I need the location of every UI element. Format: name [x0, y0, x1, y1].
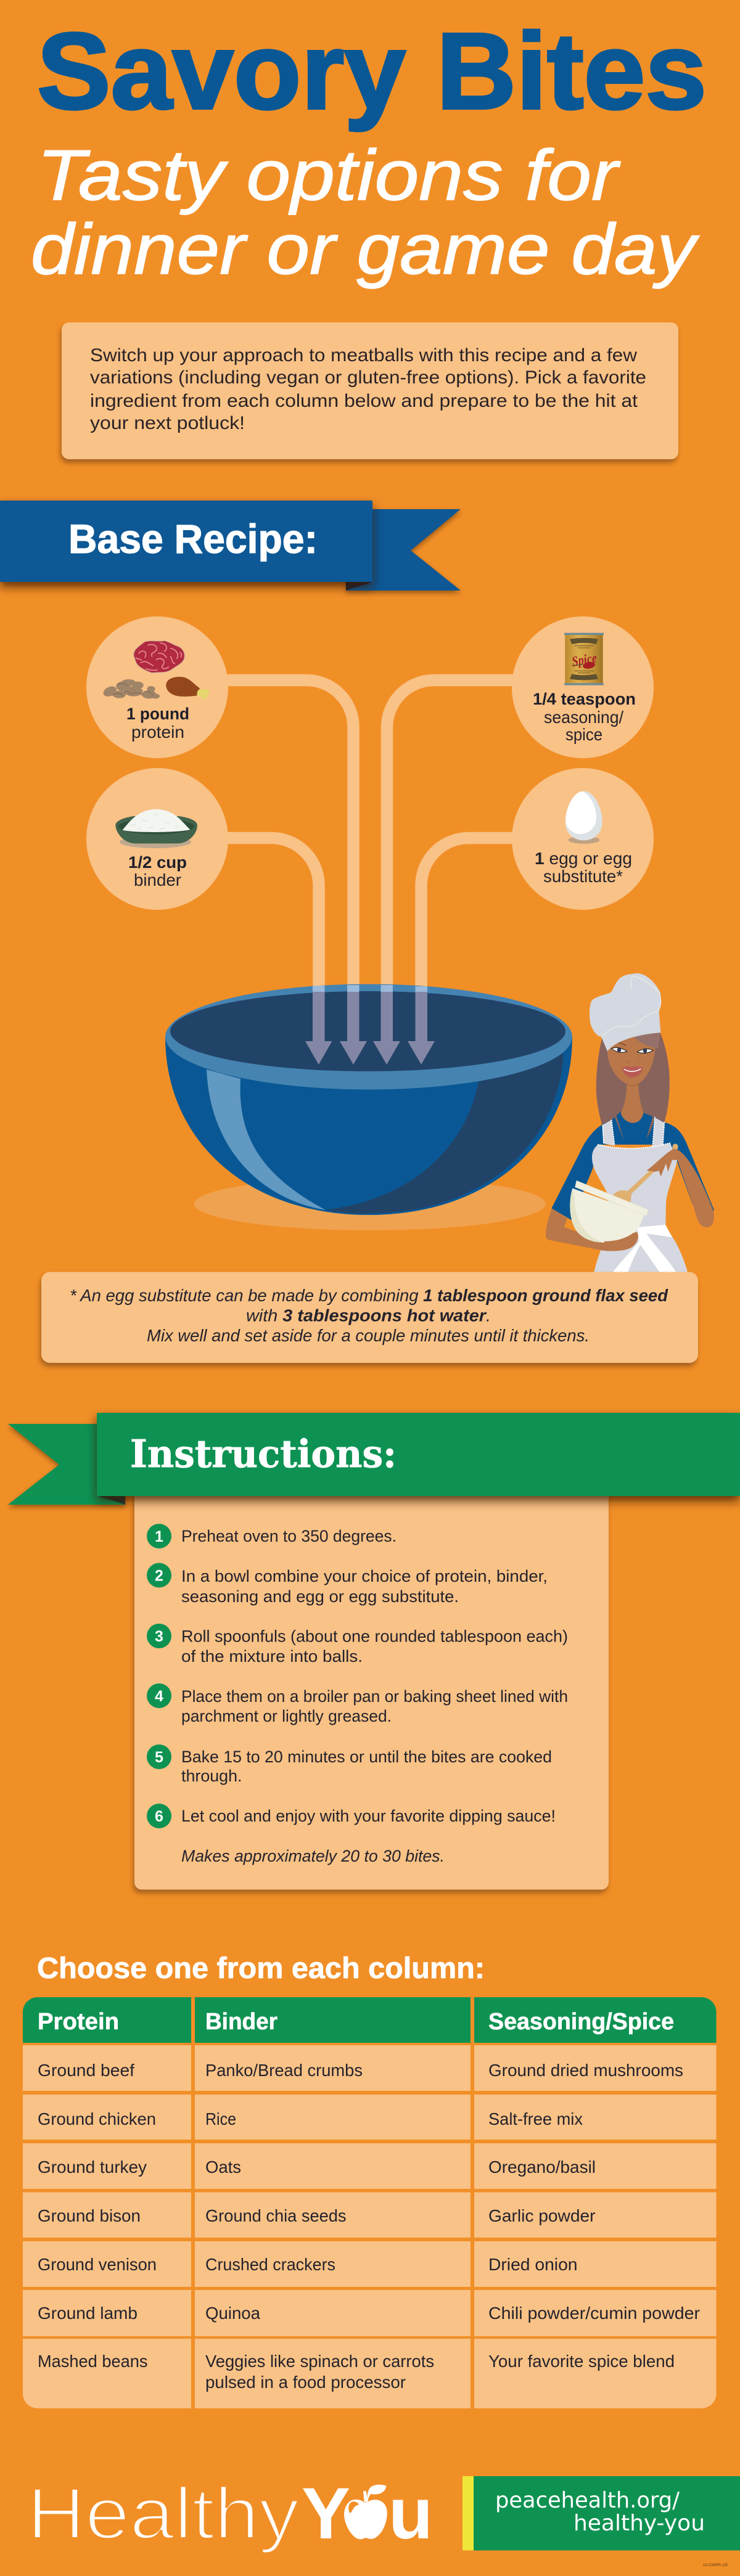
table header: Binder: [205, 2009, 278, 2035]
step 4: Place them on a broiler pan or baking sheet lined with: [181, 1687, 568, 1706]
step 5: 5: [155, 1749, 163, 1766]
step 2: 2: [155, 1567, 163, 1584]
label: 1/2 cup binder: [128, 853, 187, 889]
label: 1 pound protein: [126, 705, 189, 742]
column: binder: Oats: [205, 2157, 241, 2177]
apron: [592, 1118, 688, 1272]
fingers on bowl: [604, 1233, 638, 1251]
column: binder: Panko/Bread crumbs: [205, 2061, 363, 2080]
column: binder: Veggies like spinach or carrots: [205, 2352, 434, 2371]
step 1: 1: [155, 1528, 163, 1545]
step 2: [147, 1563, 548, 1606]
note text: * An egg substitute can be made by combining 1 tablespoon ground flax seed: [70, 1286, 668, 1305]
hair: [596, 1032, 670, 1126]
ingredient: egg: [512, 768, 654, 910]
icon: apple: [344, 2485, 387, 2539]
column: binder: Quinoa: [205, 2304, 260, 2323]
heading: instructions: Instructions:: [130, 1431, 397, 1476]
column: protein: Ground beef: [38, 2061, 134, 2080]
bowl rim: [165, 984, 572, 1090]
note text: with 3 tablespoons hot water .: [246, 1306, 491, 1325]
step 1: Preheat oven to 350 degrees.: [181, 1527, 397, 1545]
table cells: [23, 2045, 717, 2408]
website text: peacehealth.org/: [495, 2488, 680, 2513]
mixing bowl: [570, 1180, 649, 1243]
column: binder: Crushed crackers: [205, 2255, 335, 2274]
column: binder: Rice: [205, 2109, 236, 2128]
note text: [70, 1286, 668, 1345]
ingredient: protein: [86, 616, 228, 758]
step 2: seasoning and egg or egg substitute.: [181, 1587, 459, 1606]
panel: instructions: [134, 1479, 609, 1890]
icon: ground beef, beans and drumstick: [102, 640, 209, 699]
label: 1/4 teaspoon seasoning: seasoning/: [544, 708, 623, 727]
spoon: [628, 1143, 678, 1194]
step 3: of the mixture into balls.: [181, 1647, 363, 1666]
label: 1 pound protein: 1 pound: [126, 705, 189, 723]
column: seasoning: Oregano/basil: [488, 2157, 596, 2177]
column: protein: Ground venison: [38, 2255, 157, 2274]
ingredient: seasoning: [512, 616, 654, 758]
icon: spice can: [564, 633, 604, 685]
note text: Mix well and set aside for a couple minutes until it thickens.: [147, 1326, 590, 1345]
illustration: mixing bowl with arrows: [165, 984, 572, 1230]
hair strands: [615, 1115, 655, 1140]
icon: spice can: Spice: [570, 650, 598, 669]
job code: 18-COMPR-135: [703, 2563, 728, 2567]
left arm: [546, 1208, 638, 1251]
icon: egg: [565, 791, 602, 844]
shirt: [551, 1111, 714, 1220]
logo: Healthy You: u: [388, 2473, 433, 2554]
yield note: Makes approximately 20 to 30 bites.: [181, 1847, 445, 1865]
step 2: In a bowl combine your choice of protein, binder,: [181, 1567, 548, 1585]
footer: website block: [462, 2476, 740, 2551]
arrows into bowl: [305, 985, 435, 1065]
intro text: your next potluck!: [90, 413, 245, 433]
title: Savory Bites: [37, 11, 707, 132]
label: 1 egg or egg substitute: 1 egg or egg: [535, 849, 632, 868]
ribbon: base recipe: [0, 501, 461, 591]
label: 1/4 teaspoon seasoning: [533, 690, 636, 744]
lips: [622, 1060, 643, 1077]
face: [607, 1036, 655, 1086]
column: seasoning: [488, 2061, 700, 2371]
heading: base recipe: Base Recipe:: [68, 516, 318, 562]
subtitle: dinner or game day: [31, 209, 699, 289]
label: 1/2 cup binder: 1/2 cup: [128, 853, 187, 872]
label: 1/4 teaspoon seasoning: 1/4 teaspoon: [533, 690, 636, 708]
column: protein: Ground bison: [38, 2206, 141, 2225]
step 3: [147, 1624, 568, 1666]
website text: healthy-you: [574, 2511, 705, 2536]
ingredient: binder: [86, 768, 228, 910]
subtitle: [31, 135, 699, 289]
step 4: 4: [155, 1688, 163, 1705]
table header: Protein: [38, 2009, 119, 2035]
step 3: 3: [155, 1628, 163, 1645]
column: seasoning: Ground dried mushrooms: [488, 2061, 683, 2080]
column: protein: Mashed beans: [38, 2352, 148, 2371]
column: seasoning: Chili powder/cumin powder: [488, 2304, 700, 2323]
step 4: parchment or lightly greased.: [181, 1707, 392, 1725]
column: binder: Ground chia seeds: [205, 2206, 347, 2225]
logo: Healthy You: Y: [302, 2473, 350, 2554]
column: protein: Ground lamb: [38, 2304, 138, 2323]
icon: rice bowl: [115, 809, 197, 848]
bowl body: [165, 1037, 572, 1215]
step 5: [147, 1744, 552, 1785]
label: 1 pound protein: protein: [131, 722, 184, 742]
column: seasoning: Dried onion: [488, 2255, 577, 2274]
chef hat: [590, 973, 661, 1052]
step 6: [147, 1804, 556, 1828]
label: 1/4 teaspoon seasoning: spice: [565, 725, 602, 744]
intro text: [90, 345, 646, 433]
column: protein: [38, 2061, 157, 2371]
step 1: [147, 1524, 397, 1548]
label: 1 egg or egg substitute: substitute*: [543, 867, 623, 886]
panel: egg substitute note: [41, 1272, 698, 1363]
connector pipes: [216, 681, 524, 986]
hand: [646, 1149, 678, 1177]
intro text: Switch up your approach to meatballs with this recipe and a few: [90, 345, 637, 366]
step 3: Roll spoonfuls (about one rounded tablespoon each): [181, 1627, 568, 1646]
label: 1 egg or egg substitute: [535, 849, 632, 886]
column: seasoning: Your favorite spice blend: [488, 2352, 675, 2371]
label: 1/2 cup binder: binder: [134, 870, 181, 889]
step 6: 6: [155, 1808, 163, 1825]
logo: Healthy You: Healthy: [27, 2473, 299, 2554]
column: protein: Ground chicken: [38, 2109, 156, 2128]
logo: Healthy You: [27, 2473, 433, 2554]
neck: [621, 1077, 643, 1123]
intro text: ingredient from each column below and prepare to be the hit at: [90, 391, 638, 411]
column: seasoning: Salt-free mix: [488, 2109, 583, 2128]
illustration: chef: [546, 973, 714, 1272]
step 4: [147, 1683, 568, 1725]
bowl shadow: [194, 1177, 546, 1230]
eyes: [612, 1042, 653, 1053]
step 5: through.: [181, 1767, 242, 1785]
column: protein: Ground turkey: [38, 2157, 147, 2177]
right arm: [677, 1150, 714, 1227]
website text: [495, 2488, 705, 2536]
column: binder: [205, 2061, 434, 2392]
step 5: Bake 15 to 20 minutes or until the bites are cooked: [181, 1748, 552, 1766]
table header: Seasoning/Spice: [488, 2009, 674, 2035]
intro text: variations (including vegan or gluten-free options). Pick a favorite: [90, 367, 646, 388]
column: seasoning: Garlic powder: [488, 2206, 596, 2225]
column: binder: pulsed in a food processor: [205, 2373, 406, 2392]
table: [23, 1997, 717, 2408]
panel: intro: [62, 322, 678, 459]
ribbon: instructions: [8, 1413, 740, 1505]
step 6: Let cool and enjoy with your favorite dipping sauce!: [181, 1807, 556, 1825]
heading: choose one from each column: Choose one from each column:: [37, 1952, 485, 1985]
table header: [23, 1997, 717, 2043]
subtitle: Tasty options for: [37, 135, 621, 215]
